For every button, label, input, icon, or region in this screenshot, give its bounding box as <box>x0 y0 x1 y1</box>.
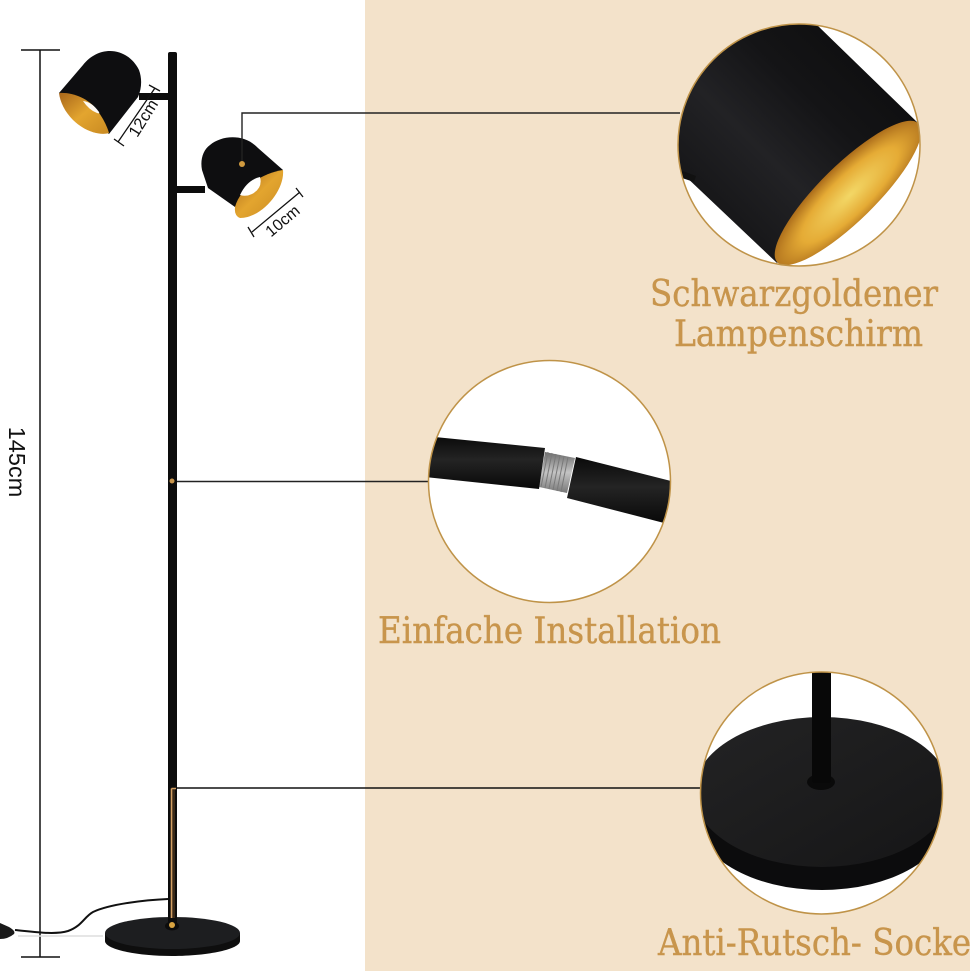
callout line: base <box>177 787 701 789</box>
dimension: 12cm <box>114 85 162 146</box>
left tube <box>425 436 545 489</box>
power cord with switch <box>0 899 168 939</box>
lower lamp shade <box>201 137 283 218</box>
pole joint dot <box>170 478 174 484</box>
dimension: 12cm: 12cm <box>125 96 162 140</box>
callout line: lampshade <box>239 113 680 167</box>
label: Einfache Installation: Einfache Installation <box>378 611 721 652</box>
detail circle: threaded joint <box>425 360 675 602</box>
height dimension: 145cm: 145cm <box>4 427 30 497</box>
label: Schwarzgoldener Lampenschirm: Lampenschirm <box>674 314 923 355</box>
beige background panel <box>365 0 970 971</box>
detail circle: lampshade <box>677 23 921 267</box>
dimension: 10cm <box>248 188 304 241</box>
thread <box>539 452 575 493</box>
upper arm <box>139 93 169 100</box>
right tube <box>567 457 675 524</box>
base screw <box>165 922 179 930</box>
upper lamp shade <box>59 51 141 134</box>
gold stripe on pole <box>171 788 176 918</box>
dimension: 10cm: 10cm <box>263 202 304 241</box>
pole <box>168 52 177 926</box>
round base <box>105 917 240 956</box>
height dimension: 145cm <box>4 50 60 957</box>
callout line: installation <box>177 480 429 482</box>
label: Schwarzgoldener Lampenschirm: Schwarzgoldener <box>650 274 939 315</box>
lower arm <box>176 186 205 193</box>
detail circle: base <box>694 665 950 914</box>
floor lamp <box>0 51 283 956</box>
label: Schwarzgoldener Lampenschirm <box>650 274 939 355</box>
